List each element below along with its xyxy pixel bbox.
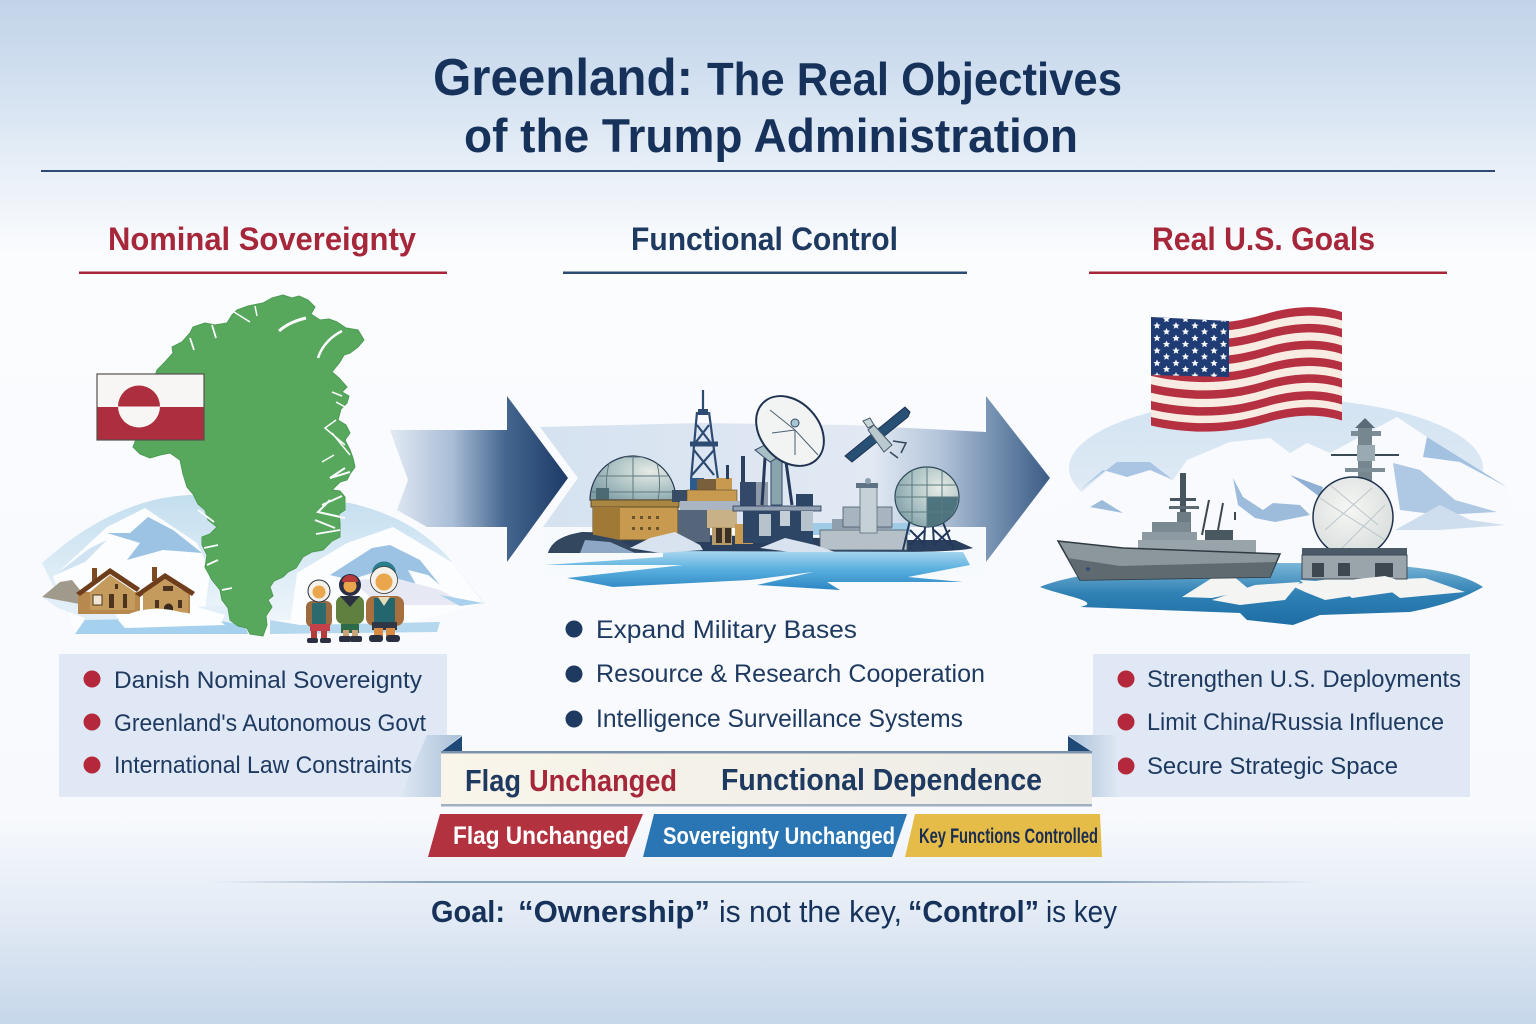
goal statement: is not the key, bbox=[719, 894, 902, 929]
goal statement: is key bbox=[1046, 894, 1117, 929]
person left bbox=[306, 580, 332, 643]
mountains left bbox=[53, 508, 210, 632]
arrow: sovereignty to control bbox=[390, 396, 568, 562]
illustration: arctic infrastructure bbox=[543, 383, 985, 590]
satellite dish bbox=[742, 383, 838, 505]
title: of the Trump Administration bbox=[464, 109, 1078, 162]
radome station bbox=[1300, 418, 1410, 592]
heading: Real U.S. Goals: Real U.S. Goals bbox=[1152, 221, 1375, 257]
water bbox=[545, 551, 970, 590]
icon: village houses bbox=[42, 567, 225, 628]
arrow: control to goals bbox=[540, 396, 1050, 562]
rocks and snow bbox=[548, 532, 835, 553]
illustration: snowy landscape with Greenland map bbox=[42, 495, 485, 634]
goal statement: “Ownership” bbox=[518, 894, 710, 929]
warship bbox=[1058, 473, 1280, 580]
ship-like station bbox=[820, 478, 907, 550]
Greenland map bbox=[133, 295, 364, 636]
goal statement bbox=[431, 894, 1117, 929]
banner: ribbon bbox=[400, 735, 1118, 806]
banner: ribbon: Flag bbox=[465, 763, 521, 798]
banner: ribbon: Functional Dependence bbox=[721, 762, 1042, 797]
satellite bbox=[845, 407, 910, 462]
tag: Key Functions Controlled bbox=[905, 814, 1102, 857]
white snow bank bbox=[543, 527, 985, 575]
bullet item: Greenland's Autonomous Govt bbox=[114, 710, 426, 737]
goal statement: Goal: bbox=[431, 894, 505, 929]
tag: Sovereignty Unchanged bbox=[643, 814, 907, 857]
bullet item: Strengthen U.S. Deployments bbox=[1147, 666, 1461, 693]
sky ellipse bbox=[1069, 398, 1483, 538]
flag: United States bbox=[1151, 307, 1342, 432]
title bbox=[433, 49, 1122, 162]
heading: Nominal Sovereignty: Nominal Sovereignty bbox=[108, 221, 416, 257]
tag: Flag Unchanged bbox=[428, 814, 643, 857]
sea band bbox=[810, 523, 910, 535]
bullet item: Limit China/Russia Influence bbox=[1147, 709, 1444, 736]
bullet item: Expand Military Bases bbox=[596, 616, 857, 644]
bullet item: Intelligence Surveillance Systems bbox=[596, 705, 963, 733]
fjords bbox=[190, 306, 350, 590]
bullet item: Danish Nominal Sovereignty bbox=[114, 667, 422, 694]
panel: left list bbox=[59, 654, 447, 797]
mountains bbox=[1057, 417, 1510, 540]
heading: Functional Control: Functional Control bbox=[631, 221, 898, 257]
central buildings bbox=[672, 456, 821, 545]
panel: right list bbox=[1093, 654, 1470, 797]
goal statement: “Control” bbox=[908, 894, 1039, 929]
snow dome backdrop bbox=[42, 495, 485, 620]
banner: ribbon: Unchanged bbox=[529, 763, 677, 798]
oil derrick bbox=[690, 390, 718, 480]
tag: Key Functions Controlled: Key Functions Controlled bbox=[919, 825, 1098, 848]
panel: center list bbox=[566, 616, 985, 733]
mountains right bbox=[290, 527, 483, 625]
illustration: mountains, warship and radome bbox=[1040, 398, 1510, 625]
sea and ice bbox=[1040, 563, 1483, 625]
tag: Flag Unchanged: Flag Unchanged bbox=[453, 822, 629, 850]
person right bbox=[366, 562, 404, 642]
small radar dome on legs bbox=[890, 465, 960, 550]
title: Greenland: bbox=[433, 49, 693, 107]
tag: Sovereignty Unchanged: Sovereignty Unchanged bbox=[663, 823, 895, 850]
bullet item: Secure Strategic Space bbox=[1147, 753, 1398, 780]
title: The Real Objectives bbox=[707, 53, 1122, 105]
bullet item: International Law Constraints bbox=[114, 752, 412, 779]
island bbox=[548, 532, 973, 553]
radar dome with gold building bbox=[589, 455, 680, 540]
snow ground and ice bbox=[42, 590, 440, 634]
flag: Greenland bbox=[97, 374, 204, 440]
bullet item: Resource & Research Cooperation bbox=[596, 660, 985, 688]
person middle bbox=[336, 574, 364, 642]
icon: three Inuit people bbox=[306, 562, 404, 643]
